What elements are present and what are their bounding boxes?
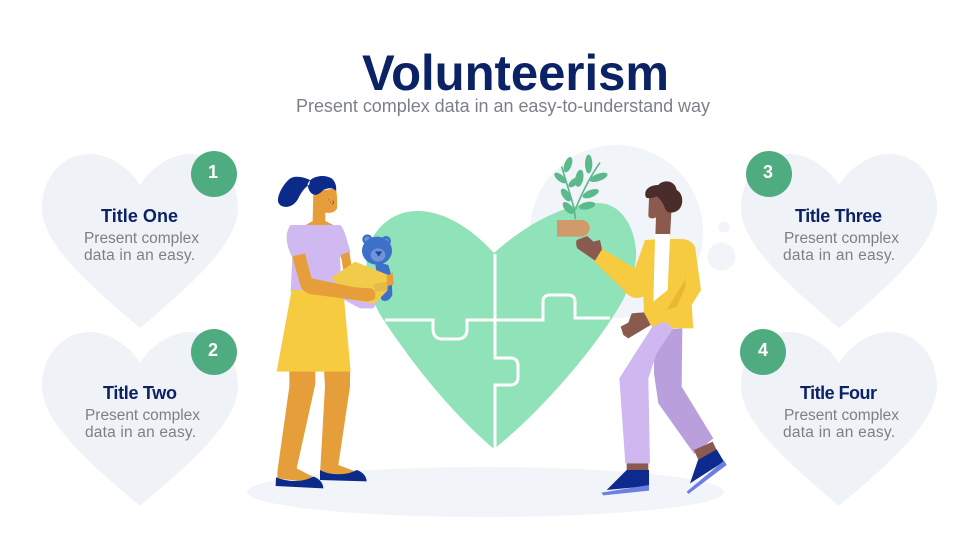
number badge 2: 2 <box>208 340 218 360</box>
number badge 2 <box>191 329 237 375</box>
man hair <box>645 181 682 213</box>
man shoes <box>601 449 727 495</box>
plant <box>553 155 609 219</box>
man jacket <box>594 239 701 328</box>
panel: title three <box>741 151 937 328</box>
panel: title one <box>42 151 238 328</box>
man holding plant <box>553 155 727 495</box>
body text: Present complex <box>784 407 899 424</box>
number badge 1: 1 <box>208 162 218 182</box>
number badge 3 <box>746 151 792 197</box>
woman hair <box>278 176 336 207</box>
woman far arm <box>341 252 352 270</box>
number badge 4: 4 <box>758 340 768 360</box>
shirt hem under box <box>338 297 378 308</box>
woman neck and face <box>305 188 337 225</box>
title: Volunteerism <box>362 45 669 101</box>
body text: data in an easy. <box>783 247 895 264</box>
woman shoes <box>276 470 367 488</box>
man neck and head <box>648 197 672 237</box>
heart background <box>741 332 937 506</box>
woman skirt <box>277 290 351 372</box>
small bubbles <box>708 222 736 270</box>
number badge 1 <box>191 151 237 197</box>
man back leg <box>654 328 713 454</box>
woman shirt <box>287 225 351 292</box>
heart background <box>741 154 937 328</box>
man ankles <box>627 442 717 471</box>
body text: Present complex <box>784 230 899 247</box>
woman holding bear and box <box>276 176 394 488</box>
body text: Present complex <box>85 407 200 424</box>
puzzle heart <box>366 203 636 449</box>
man lower hand <box>621 312 651 338</box>
body text: Present complex <box>84 230 199 247</box>
panel: title four <box>740 329 937 506</box>
subtitle: Present complex data in an easy-to-understand way <box>296 96 710 116</box>
ground ellipse <box>247 467 724 517</box>
jacket fold <box>667 267 686 310</box>
panel: title two <box>42 329 238 506</box>
body text: data in an easy. <box>84 247 195 264</box>
background circle behind man <box>530 145 703 318</box>
body text: data in an easy. <box>783 424 895 441</box>
man front leg <box>619 322 673 463</box>
woman face details <box>328 199 334 205</box>
woman hand on bear <box>387 273 394 286</box>
number badge 3: 3 <box>763 162 773 182</box>
heading: Title Four <box>800 383 877 403</box>
man shirt <box>653 234 670 302</box>
number badge 4 <box>740 329 786 375</box>
box <box>331 262 388 303</box>
woman legs <box>277 370 356 483</box>
heading: Title One <box>101 206 178 226</box>
heading: Title Three <box>795 206 882 226</box>
plant pot <box>557 220 590 237</box>
man raised hand <box>576 236 602 261</box>
heading: Title Two <box>103 383 177 403</box>
heart shape <box>366 203 636 449</box>
heart background <box>42 332 238 506</box>
body text: data in an easy. <box>85 424 196 441</box>
bear <box>362 234 392 301</box>
puzzle lines <box>385 254 610 449</box>
woman near arm <box>292 253 375 301</box>
heart background <box>42 154 238 328</box>
